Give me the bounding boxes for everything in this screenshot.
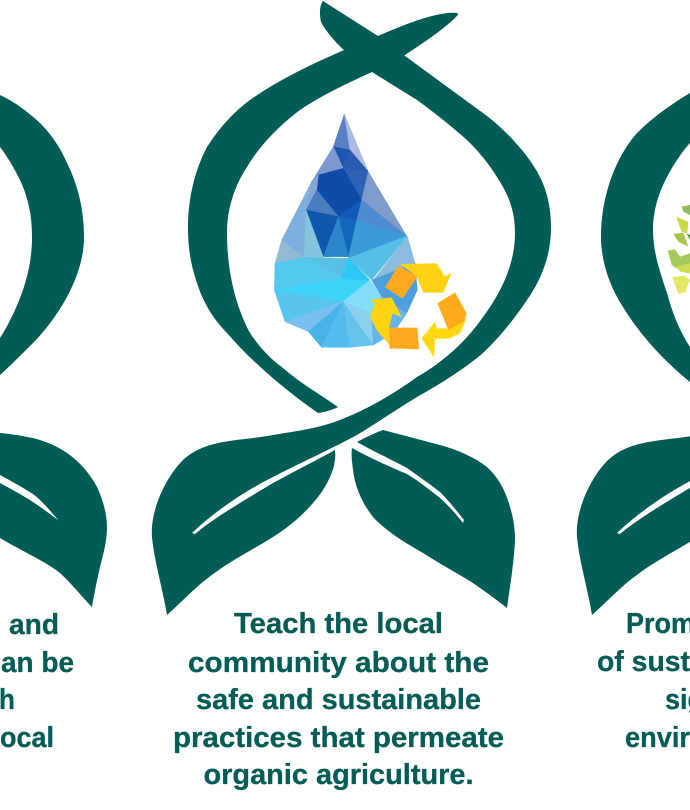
icon: low-poly water drop bbox=[274, 114, 417, 347]
centre plant text bbox=[173, 608, 504, 791]
panel: right plant (cropped) bbox=[577, 93, 690, 754]
right plant leaf bbox=[577, 420, 690, 615]
left plant text bbox=[0, 609, 74, 754]
centre plant text: safe and sustainable bbox=[196, 684, 481, 716]
panel: centre plant bbox=[152, 1, 551, 791]
centre plant right leaf bbox=[352, 430, 515, 608]
left plant text: ocal bbox=[0, 722, 54, 754]
panel: left plant (cropped) bbox=[0, 95, 107, 754]
centre plant strand and left leaf bbox=[152, 1, 551, 615]
right plant ring bbox=[601, 93, 690, 382]
left plant text: and bbox=[9, 609, 59, 641]
right plant text: of sust bbox=[597, 646, 690, 678]
centre plant text: community about the bbox=[188, 647, 489, 679]
centre plant crossing strand bbox=[188, 13, 458, 413]
centre plant text: practices that permeate bbox=[173, 722, 504, 754]
right plant text bbox=[597, 608, 690, 754]
centre plant text: Teach the local bbox=[234, 608, 443, 640]
icon: green leaf cluster bbox=[668, 205, 690, 294]
left plant leaf bbox=[0, 433, 107, 607]
left plant text: an be bbox=[1, 647, 74, 679]
centre plant text: organic agriculture. bbox=[204, 759, 474, 791]
icon: recycling arrows bbox=[370, 263, 467, 357]
left plant ring bbox=[0, 95, 84, 375]
